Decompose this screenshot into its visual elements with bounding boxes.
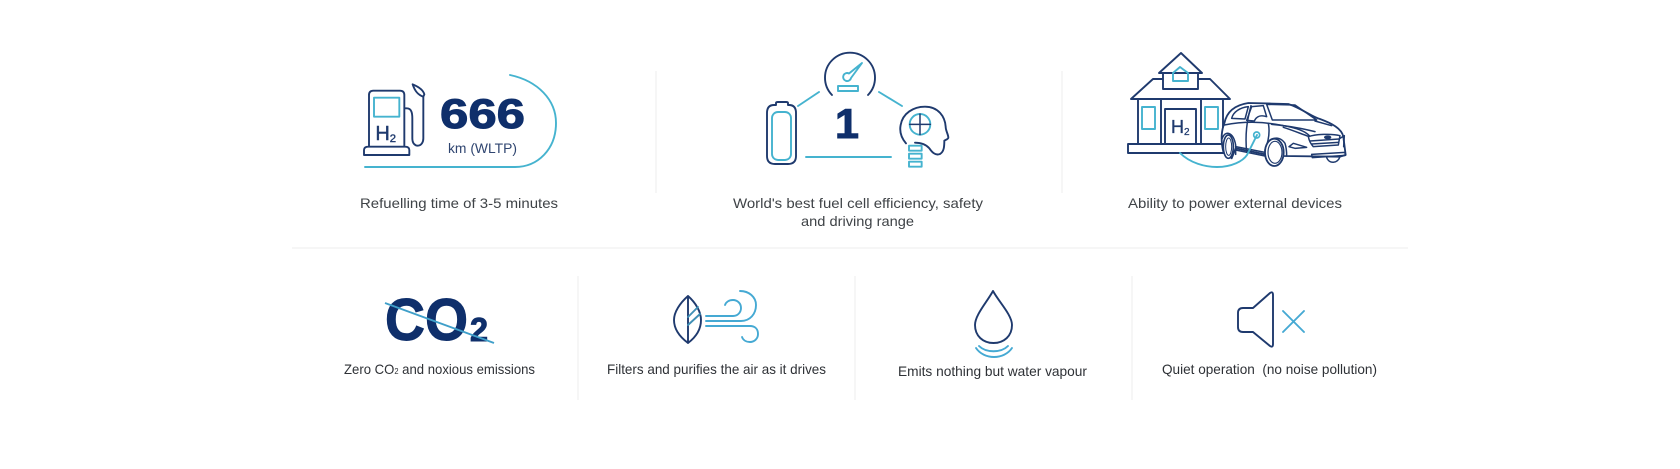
icon: leaf (674, 296, 701, 343)
number one: 1 (835, 100, 859, 147)
icon: struck-through CO2: 2 (470, 311, 488, 348)
icon: house (1128, 53, 1230, 153)
caption: driving range: and driving range (801, 213, 914, 229)
triangle connectors (798, 92, 902, 157)
caption: purifies air: Filters and purifies the air as it drives (607, 361, 826, 377)
panel: world's best (733, 53, 983, 229)
icon: hydrogen fuel pump (364, 84, 424, 155)
panel: water vapour (898, 291, 1087, 379)
panel: zero CO2 (344, 287, 535, 377)
icon: hydrogen fuel pump: 2 (390, 133, 396, 145)
icon: wind (706, 291, 758, 342)
icon: hydrogen fuel pump: H (375, 123, 390, 145)
caption: refuelling time: Refuelling time of 3-5 minutes (360, 195, 558, 211)
arc around range figure (365, 75, 556, 167)
caption: external devices: Ability to power external devices (1128, 195, 1342, 211)
icon: gauge (825, 53, 875, 95)
icon: house: 2 (1184, 127, 1190, 138)
panel: quiet operation (1162, 292, 1377, 377)
icon: car (1222, 103, 1346, 166)
icon: struck-through CO2: CO (385, 287, 468, 353)
icon: power cable (1180, 135, 1257, 167)
caption: best efficiency: World's best fuel cell efficiency, safety (733, 195, 983, 211)
icon: house: H (1171, 117, 1184, 137)
panel: external power (1128, 53, 1346, 211)
icon: water drop (975, 291, 1012, 357)
icon: muted speaker (1238, 292, 1304, 347)
caption: water vapour: Emits nothing but water vapour (898, 363, 1087, 379)
icon: battery (767, 102, 796, 164)
icon: head with crosshair (900, 107, 948, 167)
caption: quiet operation: Quiet operation (no noise pollution) (1162, 361, 1377, 377)
range figure 666: 666 (440, 90, 525, 137)
caption: zero emissions: Zero CO2 and noxious emissions (344, 361, 535, 377)
range unit: km (WLTP) (448, 140, 517, 156)
panel: refuelling (360, 75, 558, 211)
panel: air filtering (607, 291, 826, 377)
